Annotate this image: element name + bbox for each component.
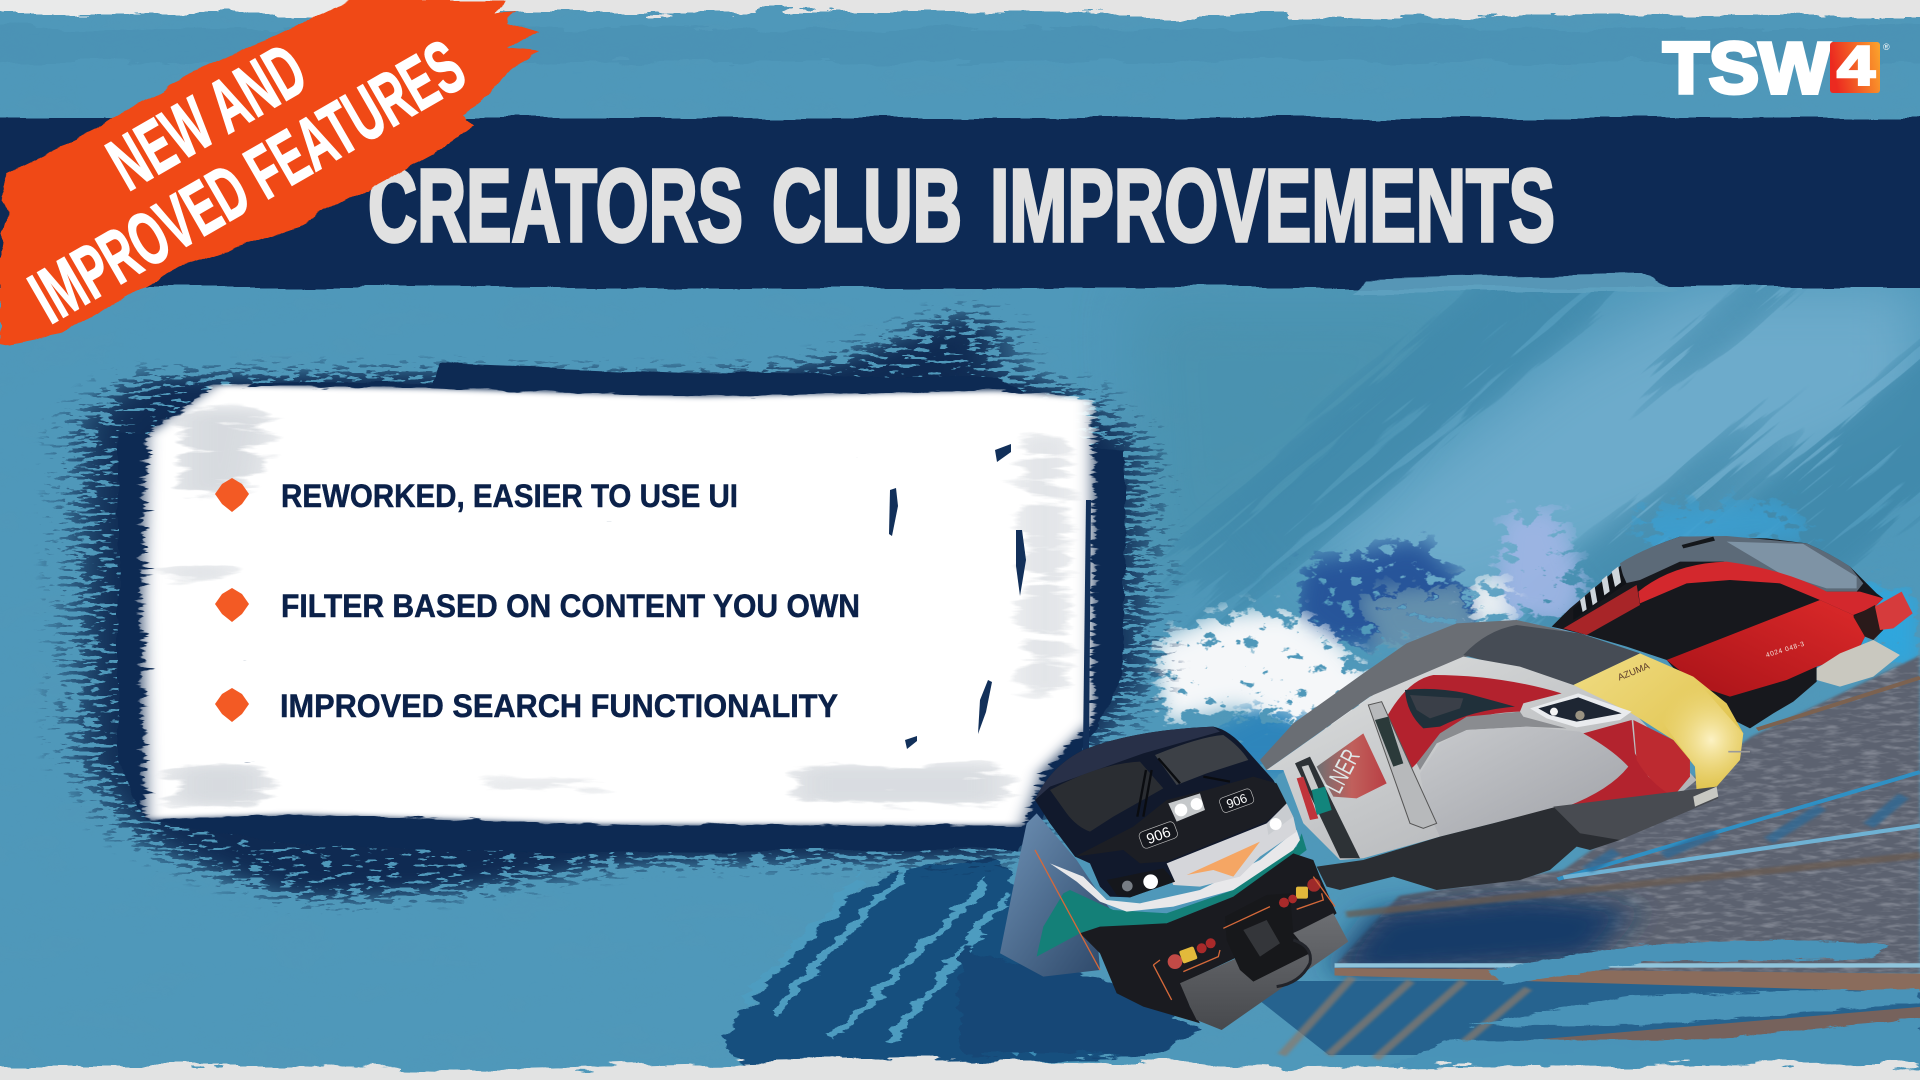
item: search: IMPROVED SEARCH FUNCTIONALITY — [280, 688, 838, 724]
LNER lettering: LNER — [1320, 745, 1366, 798]
logo: TSW4: 4 — [1837, 34, 1875, 97]
train: LNER Azuma — [1260, 620, 1750, 890]
number plate right: 906 — [1225, 791, 1249, 811]
icon: orange diamond — [215, 588, 249, 622]
title: CREATORS — [368, 148, 743, 263]
panel: white brush area — [140, 384, 1095, 826]
list — [215, 478, 860, 724]
train: red OBB Talent — [1552, 536, 1913, 728]
number plate right — [1218, 788, 1255, 814]
ground and tracks — [1235, 655, 1920, 1080]
logo: TSW4: ® — [1883, 42, 1890, 52]
red train number: 4024 048-3 — [1765, 641, 1806, 659]
item: filter: FILTER BASED ON CONTENT YOU OWN — [281, 588, 860, 624]
trains and track scene — [960, 536, 1920, 1080]
lower left shadow — [960, 950, 1200, 1053]
train: Amtrak 906 locomotive — [1000, 727, 1348, 1030]
orange banner — [0, 0, 540, 345]
title band — [0, 118, 1920, 292]
icon: orange diamond — [215, 688, 249, 722]
logo: TSW4: TSW — [1663, 29, 1830, 109]
Azuma lettering: AZUMA — [1616, 660, 1652, 683]
title: CLUB — [772, 148, 962, 263]
item: reworked UI: REWORKED, EASIER TO USE UI — [281, 478, 738, 514]
brush strokes: lower centre — [722, 857, 1142, 1067]
top paint edge — [0, 0, 1920, 16]
number plate left: 906 — [1145, 825, 1173, 848]
icon: orange diamond — [215, 478, 249, 512]
title: IMPROVEMENTS — [990, 148, 1555, 263]
number plate left — [1138, 820, 1179, 850]
splash behind trains — [1150, 495, 1920, 775]
brush strokes: upper right — [1151, 192, 1920, 666]
bottom paint edge — [0, 1020, 1920, 1080]
title — [368, 148, 1555, 263]
panel: dark brush backing — [70, 300, 1155, 905]
